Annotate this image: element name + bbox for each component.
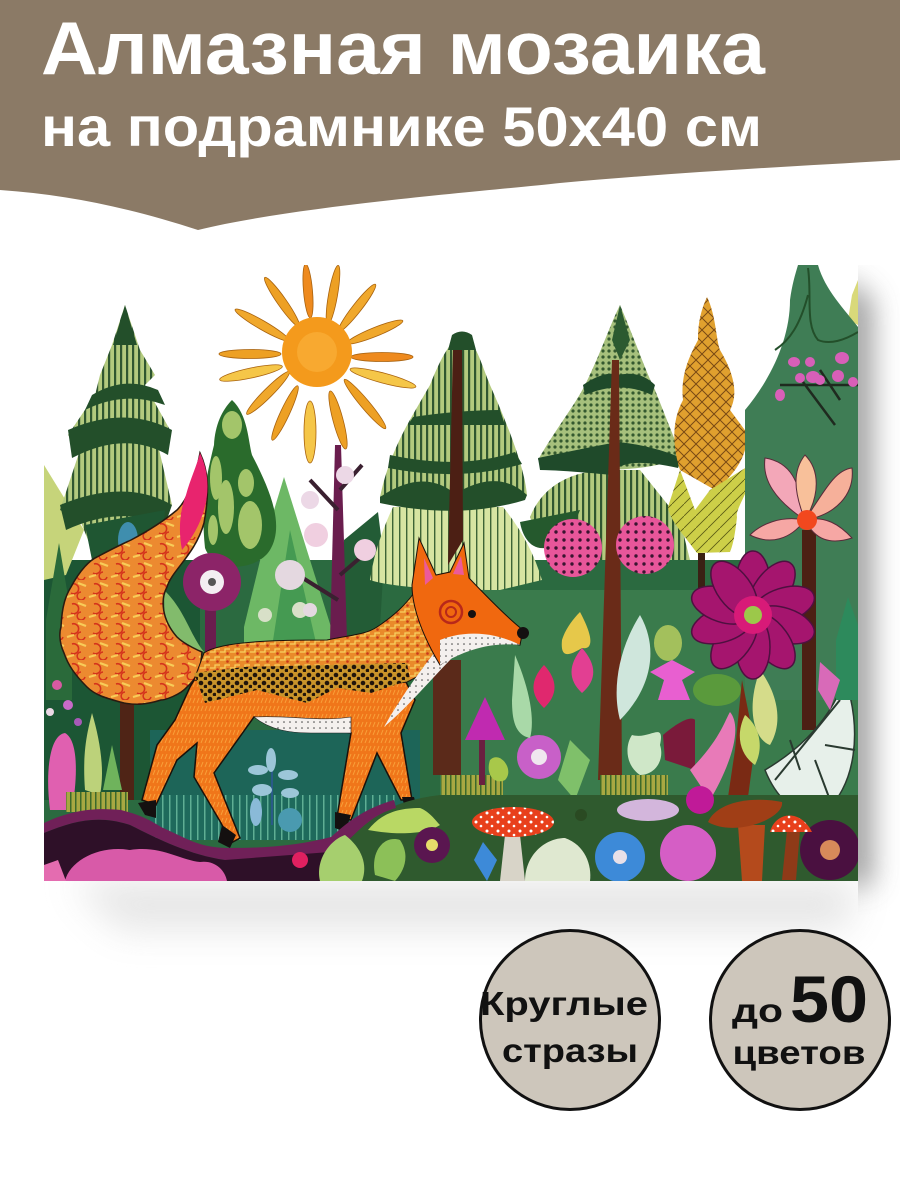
tree: big striped pine (370, 332, 542, 775)
fox tail (60, 453, 207, 704)
brown mushrooms (708, 800, 812, 881)
painting: forest with fox (44, 264, 860, 882)
red mushroom (472, 807, 554, 881)
badge: up to 50 colors (710, 930, 890, 1110)
subtitle: на подрамнике 50х40 см (41, 95, 762, 158)
fox white stripe (254, 717, 351, 733)
pink flower right (750, 455, 852, 730)
center plants (441, 612, 741, 800)
small ground plants (292, 786, 860, 882)
small purple flower behind fox (183, 553, 241, 655)
blue plant under fox (150, 748, 400, 840)
tree: textured pine (520, 305, 690, 780)
fox body (194, 594, 434, 684)
banner (0, 0, 900, 230)
sun (219, 264, 417, 463)
fox belly band (194, 663, 410, 703)
fox paws (138, 797, 418, 848)
badge: round rhinestones (480, 930, 660, 1110)
magenta flower (687, 551, 819, 679)
left plants (46, 680, 128, 812)
sky (44, 265, 858, 881)
tree: yellow leaf (668, 297, 745, 588)
forest background (44, 280, 860, 881)
badge: round rhinestones: Круглые (480, 985, 648, 1022)
title: Алмазная мозаика (41, 6, 766, 90)
canvas shadow (70, 275, 872, 930)
fox head (412, 538, 523, 665)
pink dotted balls (544, 516, 674, 577)
tree: dark pine left (60, 305, 172, 800)
ground (44, 795, 860, 881)
tree: round green (203, 400, 276, 567)
tree: dark green right (745, 265, 858, 700)
tree: blossom trunk (258, 445, 376, 640)
badge: up to 50 colors: 50 (790, 962, 868, 1036)
badge: up to 50 colors: цветов (732, 1034, 866, 1071)
badge: up to 50 colors: до (732, 992, 783, 1029)
right plants (663, 597, 858, 815)
fox legs (142, 670, 415, 843)
fox (138, 538, 529, 848)
badge: round rhinestones: стразы (502, 1032, 638, 1069)
